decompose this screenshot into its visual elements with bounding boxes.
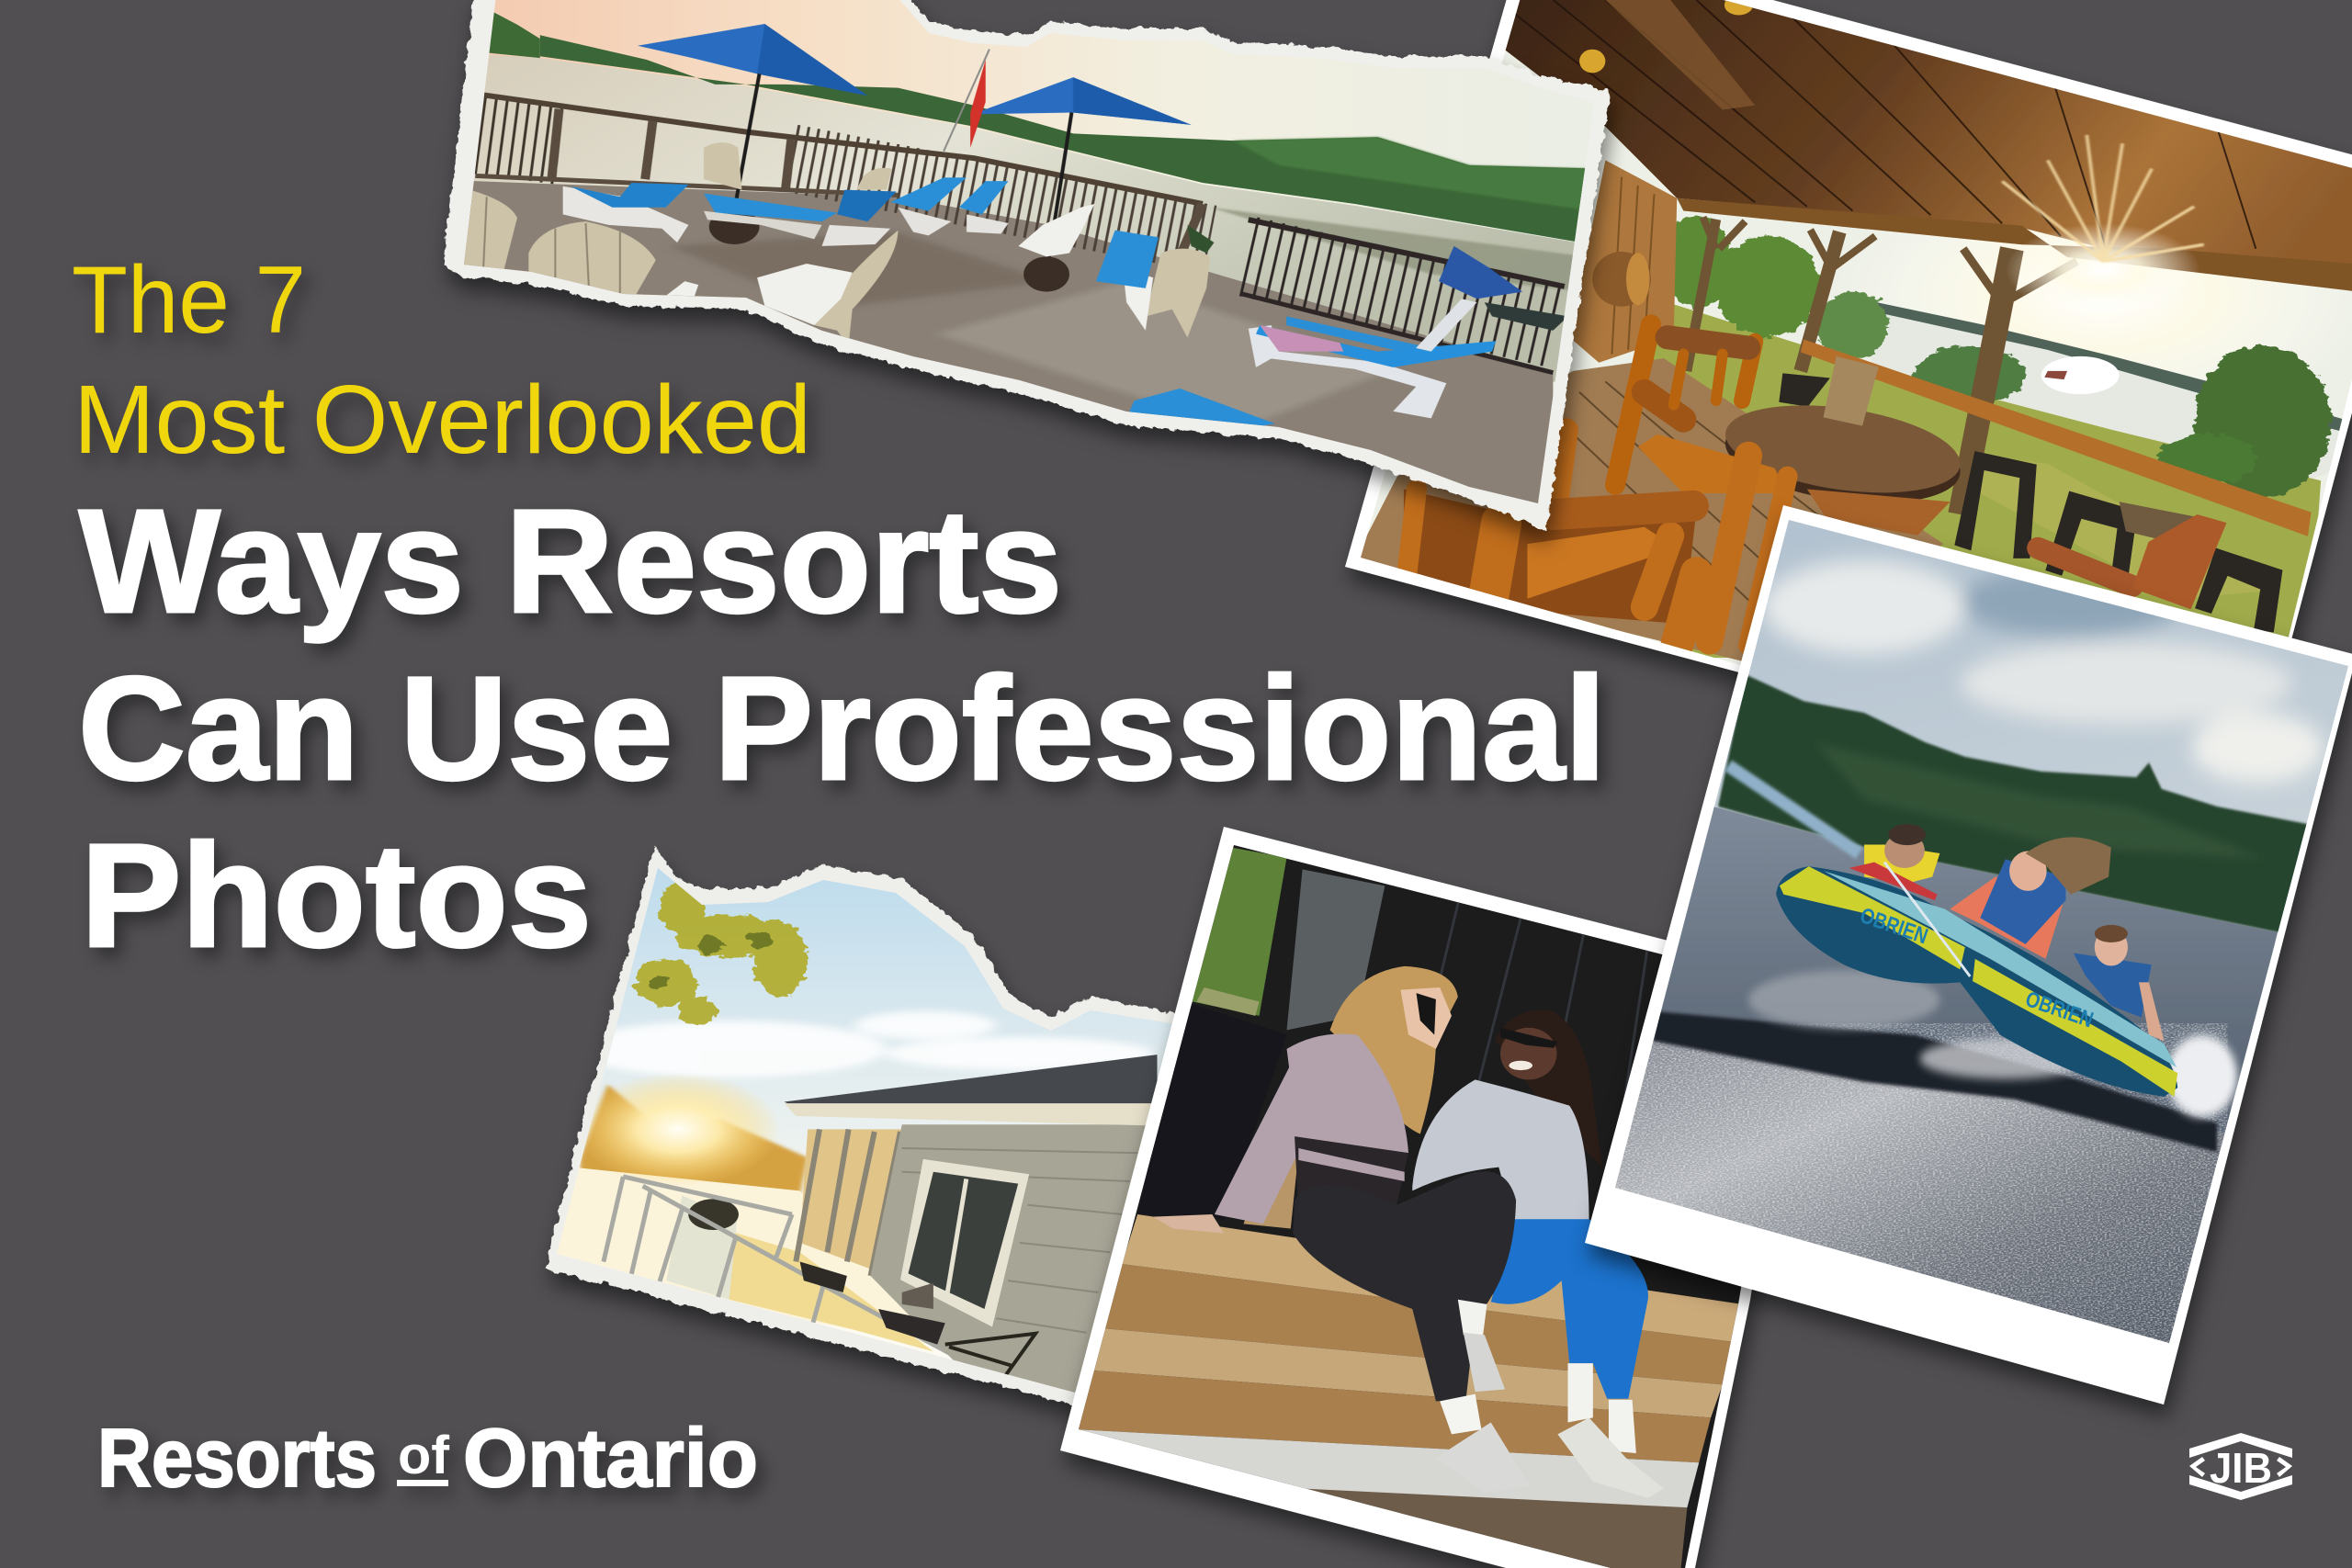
- logo: Resorts of Ontario: Ontario: [463, 1413, 758, 1505]
- photo: two women laughing on wooden steps: [1060, 827, 1762, 1568]
- woman in blue leggings: [1495, 1010, 1602, 1168]
- logo: Resorts of Ontario: of: [398, 1426, 450, 1485]
- photo: torn dock with blue umbrellas: [425, 0, 1659, 551]
- adirondack chairs: [464, 142, 1210, 346]
- logo: JIB badge: JIB: [2210, 1444, 2272, 1492]
- sun loungers: [563, 177, 1009, 246]
- tube brand text: OBRIEN: [2022, 987, 2097, 1032]
- torn paper edge: [443, 0, 1610, 531]
- logo: Resorts of Ontario: [97, 1413, 758, 1505]
- photo: lakeside pavilion with log chairs: [1345, 0, 2352, 691]
- title: [72, 247, 1606, 977]
- logo: JIB badge: [2189, 1433, 2292, 1500]
- boathouse: [800, 1129, 902, 1280]
- title line: Can Use Professional: Can Use Professional: [78, 646, 1606, 810]
- umbrellas: [638, 24, 867, 96]
- photo: torn boathouse at sunrise: [545, 845, 1175, 1422]
- front lounger: [1286, 316, 1431, 355]
- title line: Most Overlooked: Most Overlooked: [74, 366, 811, 474]
- title line: Ways Resorts: Ways Resorts: [79, 479, 1062, 643]
- inflatable tube: [1776, 866, 2177, 1097]
- tube brand text: [1857, 903, 2097, 1032]
- title line: Photos: Photos: [81, 813, 592, 977]
- woman in black leggings: [1330, 966, 1458, 1134]
- kids: [1864, 844, 1939, 883]
- torn paper edge: [545, 846, 1213, 1405]
- logo: Resorts of Ontario: Resorts: [97, 1413, 377, 1505]
- title line: The 7: The 7: [72, 247, 306, 354]
- tube brand text: OBRIEN: [1857, 903, 1931, 949]
- sunlit leaves: [635, 881, 808, 1025]
- photo: kids on a tube with white polaroid frame: [1562, 496, 2352, 1404]
